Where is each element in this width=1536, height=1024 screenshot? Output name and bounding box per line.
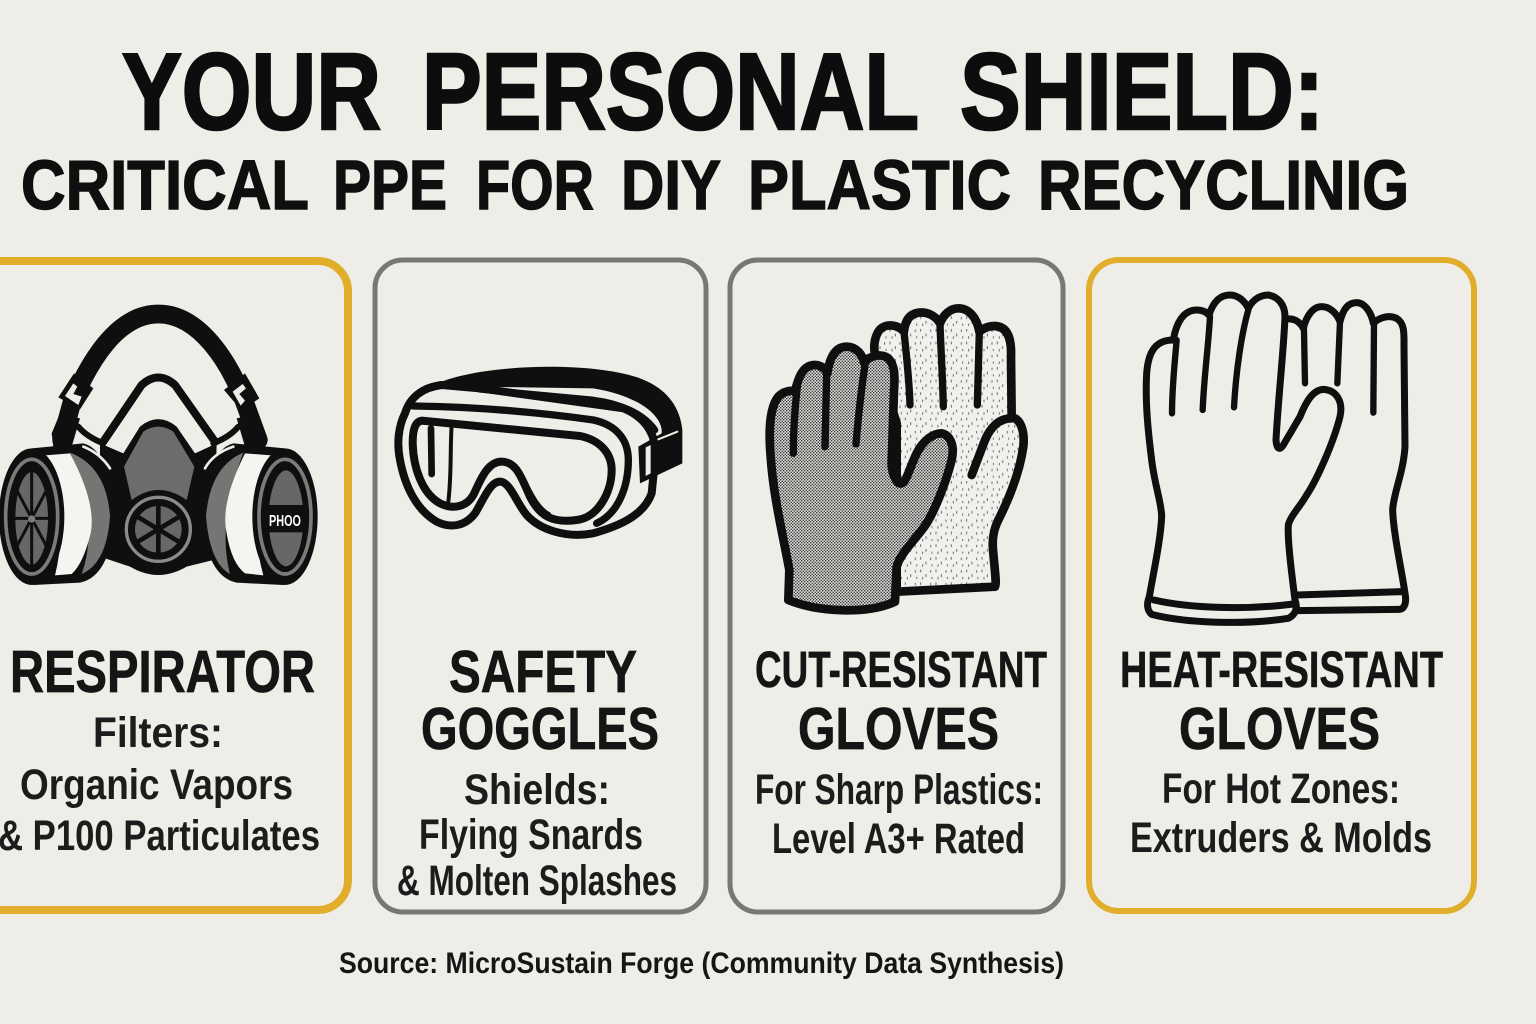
title [122,31,1324,153]
text: goggles detail [397,766,677,905]
text: goggles detail: Shields: [464,766,610,814]
text: cut-resistant heading: CUT-RESISTANT [755,641,1047,698]
text: cut-resistant detail: Level A3+ Rated [772,815,1025,863]
text: goggles detail: Flying Snards [419,811,643,859]
text: heat-resistant heading [1120,641,1443,762]
icon: respirator [0,314,318,585]
mask body [100,419,217,575]
text: respirator detail: Organic Vapors [20,761,293,809]
text: respirator detail: & P100 Particulates [0,812,320,860]
subtitle: RECYCLINIG [1038,146,1409,224]
panel: heat-resistant gloves [1089,260,1474,911]
filter label: PHOO [269,513,301,530]
text: goggles heading: GOGGLES [421,696,659,762]
subtitle: DIY [621,146,721,224]
text: heat-resistant detail: Extruders & Molds [1130,814,1432,862]
subtitle: FOR [476,146,594,224]
subtitle [21,146,1409,224]
text: respirator detail: Filters: [93,709,223,757]
source note: Source: MicroSustain Forge (Community Data Synthesis) [339,947,1064,980]
text: cut-resistant heading [755,641,1047,762]
text: heat-resistant detail [1130,765,1432,862]
icon: goggles [398,367,682,535]
text: cut-resistant detail: For Sharp Plastics: [755,766,1043,814]
panel: cut-resistant gloves [730,260,1063,912]
text: heat-resistant detail: For Hot Zones: [1162,765,1400,813]
text: cut-resistant heading: GLOVES [798,696,999,762]
text: respirator detail [0,709,320,860]
text: goggles detail: & Molten Splashes [397,857,677,905]
text: heat-resistant heading: GLOVES [1179,696,1380,762]
title: PERSONAL [422,31,919,153]
title: SHIELD: [960,31,1324,153]
icon: heat-resistant gloves [1146,295,1406,622]
text: cut-resistant detail [755,766,1043,863]
subtitle: CRITICAL [21,146,309,224]
text: goggles heading: SAFETY [449,639,637,705]
right cartridge [202,443,285,585]
left cartridge [32,443,115,585]
icon: cut-resistant gloves [770,308,1024,610]
text: goggles heading [421,639,659,762]
title: YOUR [122,31,381,153]
panel: safety goggles [375,260,706,912]
text: respirator heading: RESPIRATOR [10,639,315,705]
subtitle: PLASTIC [748,146,1011,224]
panel: respirator [0,261,348,910]
subtitle: PPE [333,146,447,224]
